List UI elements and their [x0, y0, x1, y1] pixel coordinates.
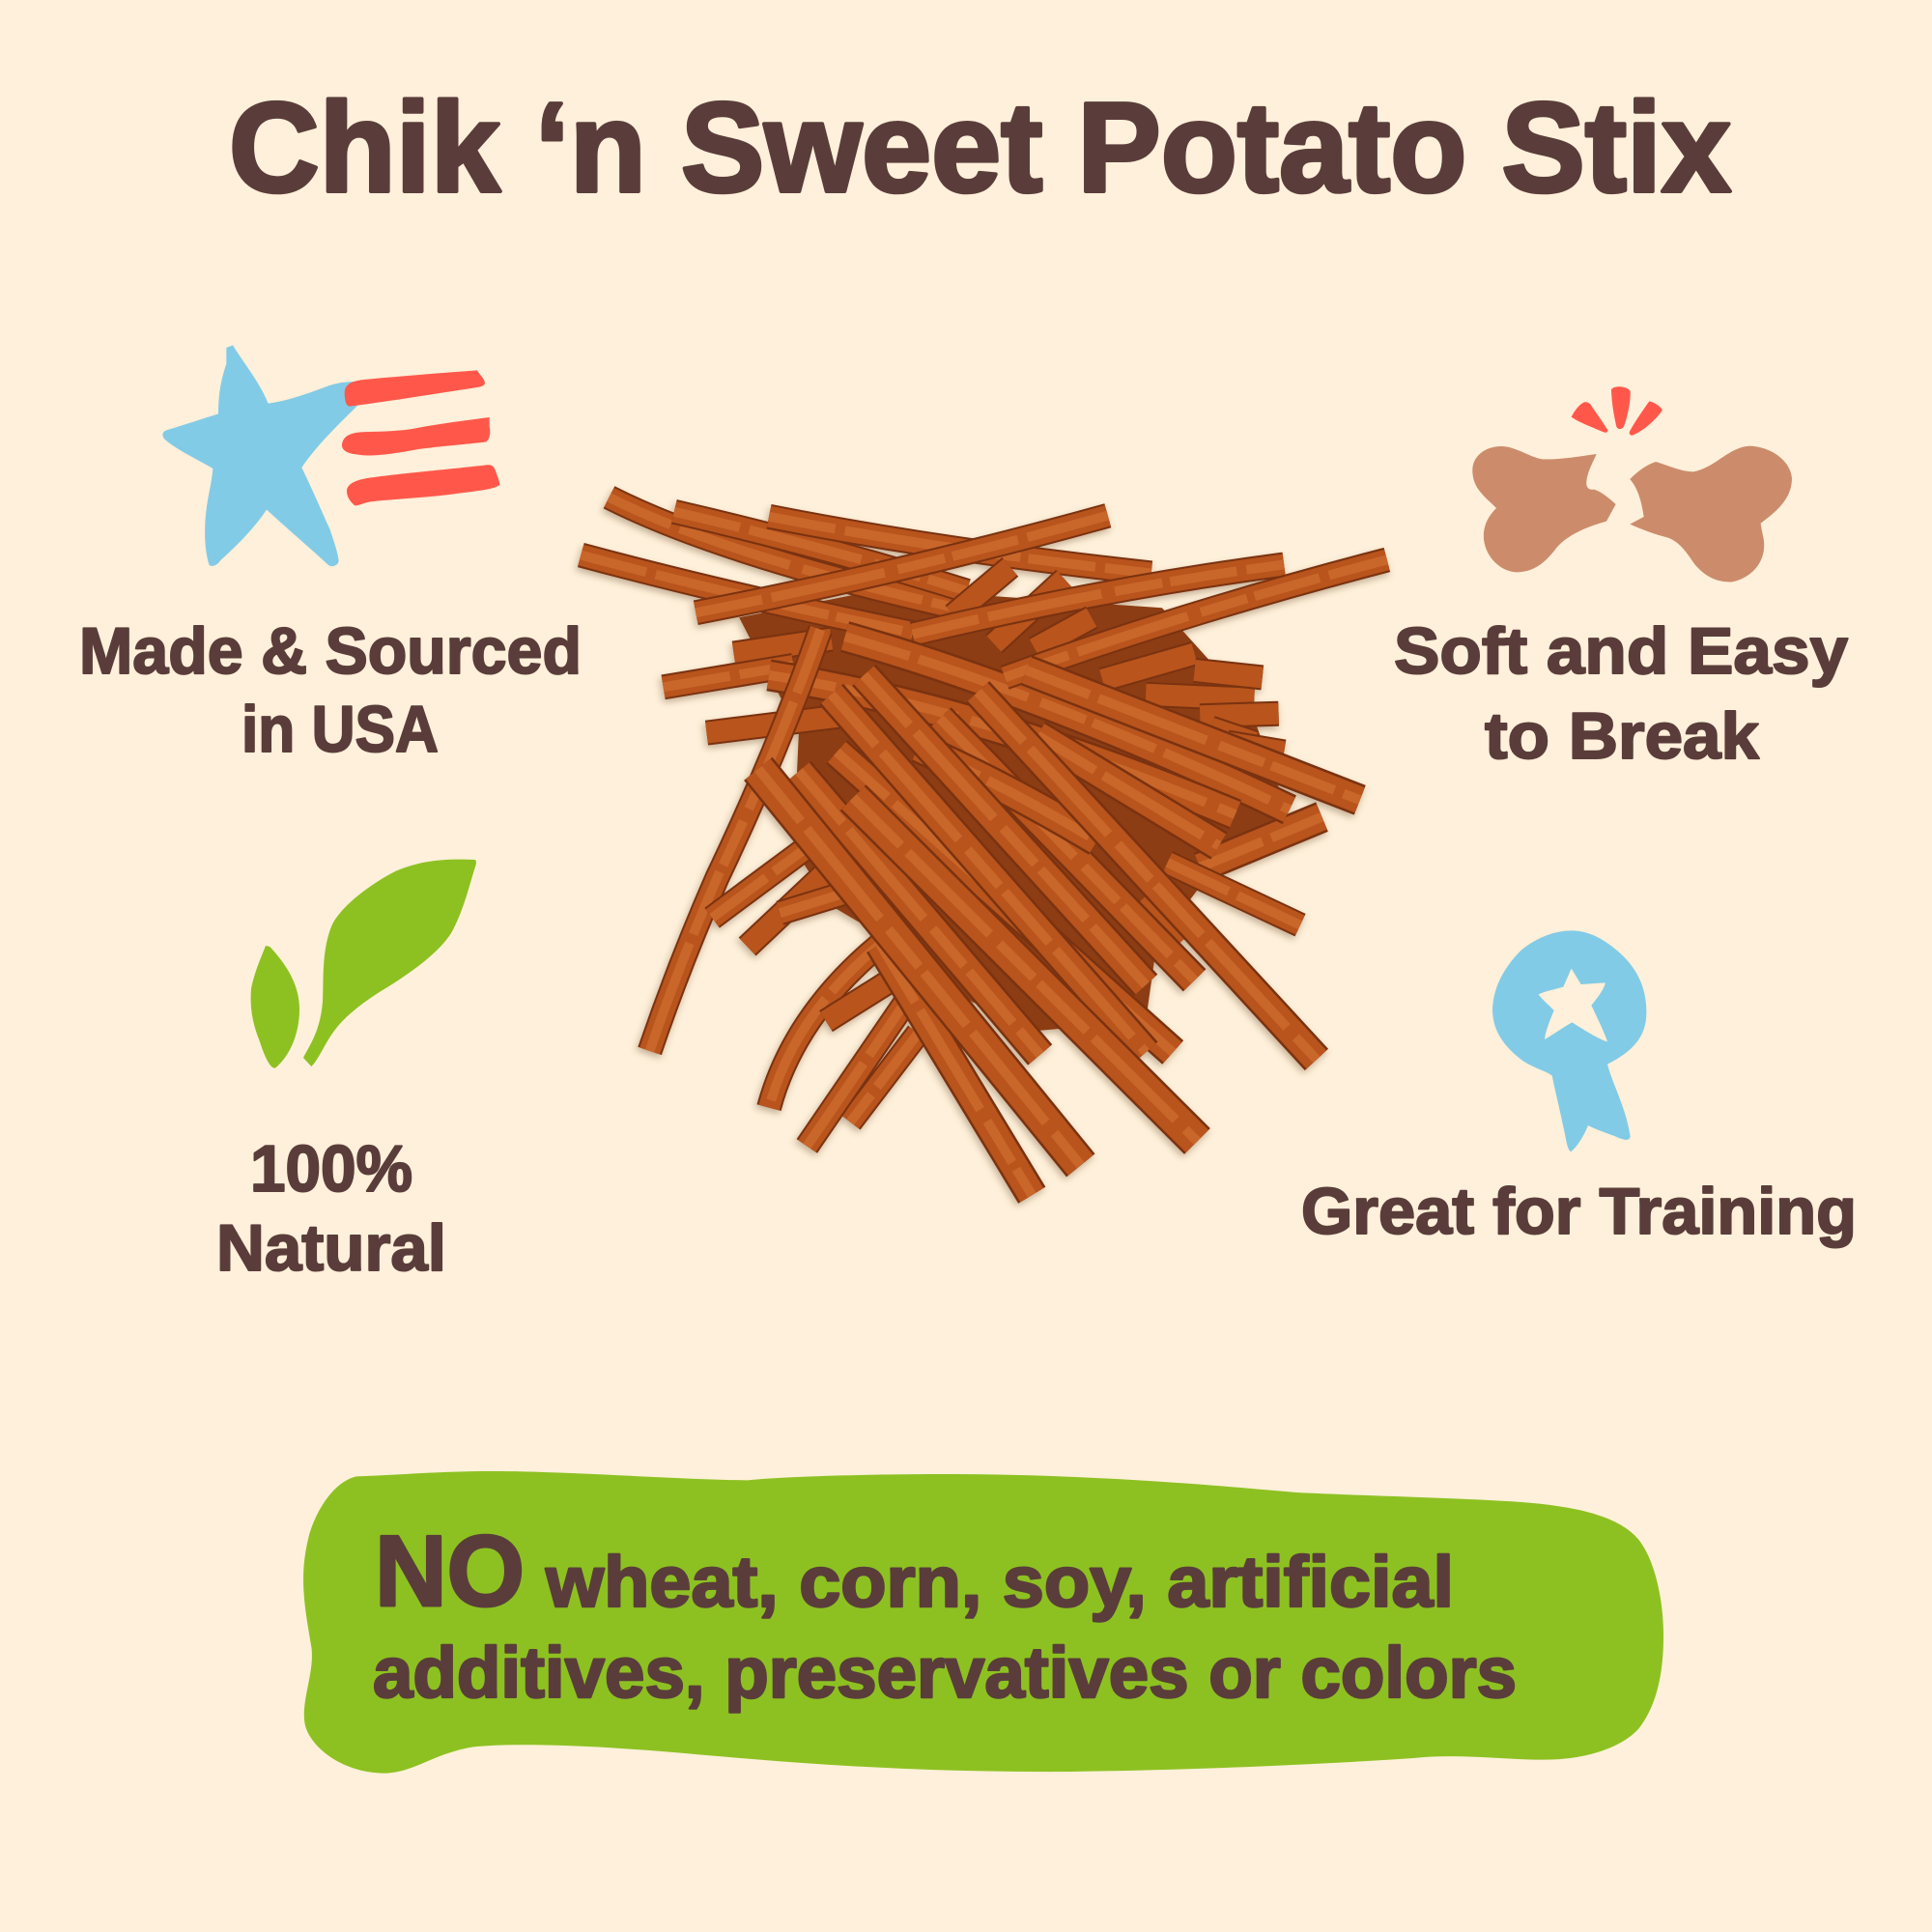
icon: award ribbon — [1492, 930, 1646, 1151]
title: Chik ‘n Sweet Potato Stix — [229, 76, 1731, 218]
callout text: additives, preservatives or colors — [373, 1633, 1517, 1713]
callout text — [373, 1516, 1517, 1713]
callout text: NO — [375, 1516, 525, 1628]
label: 100% natural: Natural — [216, 1211, 446, 1285]
label: made and sourced: Made & Sourced — [79, 614, 582, 688]
panel: made and sourced in USA — [79, 345, 582, 766]
panel: great for training — [1301, 930, 1857, 1248]
callout text: wheat, corn, soy, artificial — [545, 1542, 1454, 1622]
product photo: pile of sweet potato sticks — [581, 497, 1387, 1195]
label: soft and easy to break — [1394, 614, 1848, 773]
label: made and sourced — [79, 614, 582, 766]
label: 100% natural — [216, 1132, 446, 1285]
icon: leaves — [251, 860, 476, 1068]
icon: shooting star with stripes — [162, 345, 499, 566]
callout: no wheat, corn, soy — [303, 1471, 1663, 1774]
label: made and sourced: in USA — [242, 693, 439, 766]
callout background blob — [303, 1471, 1663, 1774]
label: 100% natural: 100% — [250, 1132, 412, 1206]
icon: broken bone — [1472, 386, 1792, 582]
label: soft and easy to break: to Break — [1485, 699, 1759, 773]
label: soft and easy to break: Soft and Easy — [1394, 614, 1848, 688]
label: great for training: Great for Training — [1301, 1175, 1857, 1248]
panel: soft and easy to break — [1394, 386, 1848, 773]
panel: 100% natural — [216, 860, 476, 1285]
